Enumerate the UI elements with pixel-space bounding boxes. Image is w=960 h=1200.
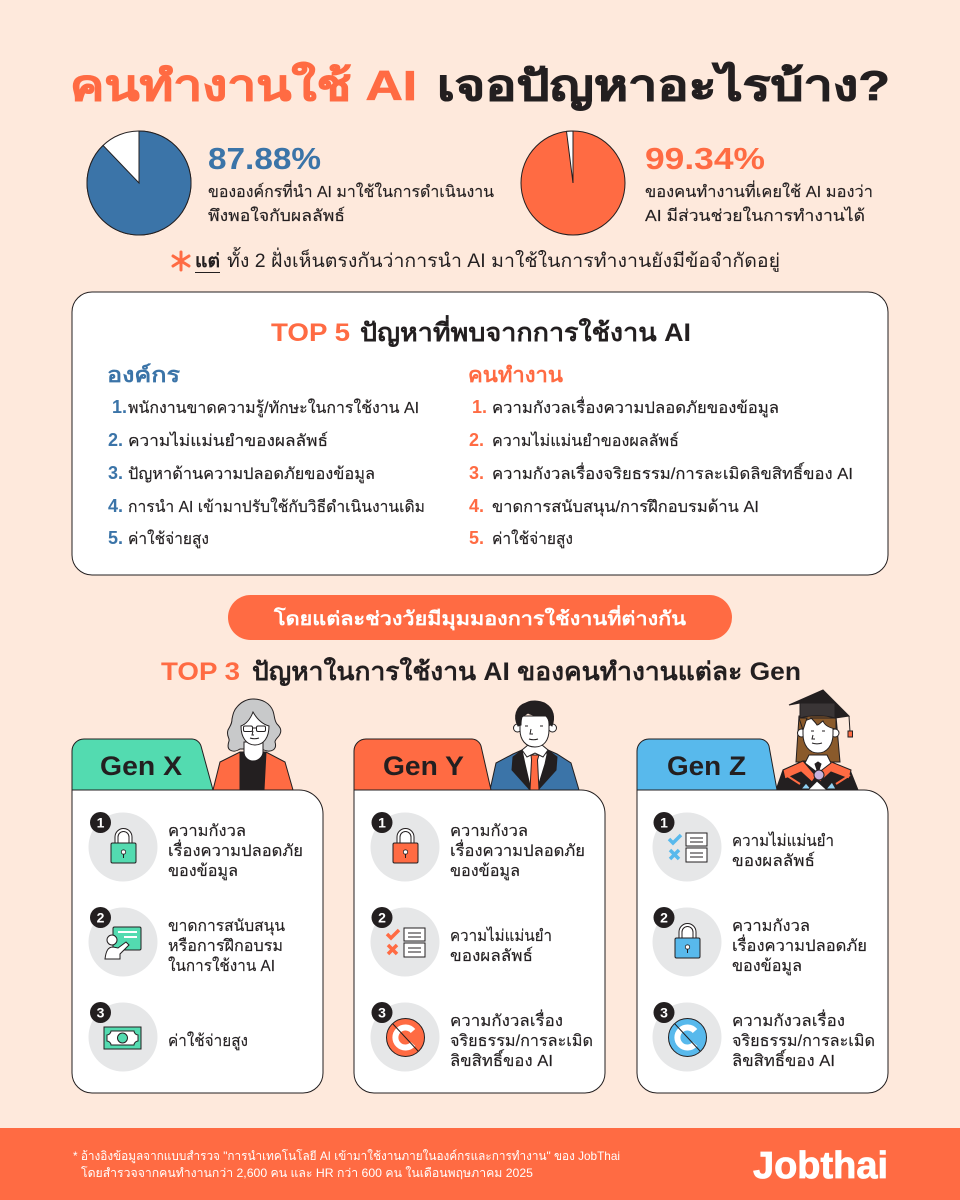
list: organisations: 5. — [108, 528, 123, 548]
section heading: ปัญหาในการใช้งาน AI ของคนทำงานแต่ละ Gen — [252, 656, 801, 686]
item 1: ความกังวล — [450, 823, 528, 840]
stat value: 87.88% — [208, 141, 321, 176]
item 1: ความไม่แม่นยำ — [732, 831, 834, 850]
footer — [0, 1128, 960, 1200]
card: Gen Z — [637, 739, 888, 1093]
item 2: ของผลลัพธ์ — [450, 946, 533, 965]
item 2 — [652, 907, 867, 976]
stat description: ขององค์กรที่นำ AI มาใช้ในการดำเนินงาน — [208, 180, 494, 201]
title — [70, 61, 890, 111]
stat: workers — [521, 131, 873, 235]
list: organisations: 2. — [108, 430, 123, 450]
logo: Jobthai — [753, 1145, 888, 1187]
item 1 — [370, 812, 585, 882]
list: workers: 3. — [469, 463, 484, 483]
source note: * อ้างอิงข้อมูลจากแบบสำรวจ "การนำเทคโนโลยี AI เข้ามาใช้งานภายในองค์กรและการทำงาน" ของ JobThai — [73, 1149, 620, 1164]
item 2: 2 — [378, 910, 386, 926]
item 2: ความกังวล — [732, 918, 810, 935]
item 3: 3 — [378, 1004, 386, 1020]
item 2: เรื่องความปลอดภัย — [732, 934, 867, 955]
stat description: AI มีส่วนช่วยในการทำงานได้ — [645, 206, 865, 225]
item 2: ขาดการสนับสนุน — [168, 918, 285, 936]
tab label: Gen Z — [667, 751, 746, 781]
illustration: Gen Y man — [490, 701, 579, 790]
stat description — [645, 180, 873, 225]
list: organisations — [107, 363, 425, 549]
list: workers: ขาดการสนับสนุน/การฝึกอบรมด้าน AI — [492, 498, 759, 517]
list: workers: 4. — [469, 496, 484, 516]
pill banner — [228, 595, 732, 640]
stat description — [208, 180, 494, 225]
item 1: ของข้อมูล — [450, 862, 520, 881]
pill banner: โดยแต่ละช่วงวัยมีมุมมองการใช้งานที่ต่างกัน — [273, 605, 686, 631]
item 2: หรือการฝึกอบรม — [168, 937, 283, 955]
list: organisations: 3. — [108, 463, 123, 483]
stat description: ของคนทำงานที่เคยใช้ AI มองว่า — [645, 180, 873, 201]
item 3: ลิขสิทธิ์ของ AI — [450, 1049, 553, 1070]
item 2: 2 — [97, 910, 105, 926]
stat value: 99.34% — [645, 141, 765, 176]
list: organisations: 1. — [112, 397, 127, 417]
panel: top 5 problems — [72, 292, 888, 575]
list: workers: ค่าใช้จ่ายสูง — [492, 529, 573, 549]
note line: ทั้ง 2 ฝั่งเห็นตรงกันว่าการนำ AI มาใช้ในการทำงานยังมีข้อจำกัดอยู่ — [227, 247, 780, 272]
list: organisations: องค์กร — [107, 363, 181, 387]
list: workers: ความกังวลเรื่องความปลอดภัยของข้อมูล — [492, 396, 779, 418]
list: workers: ความไม่แม่นยำของผลลัพธ์ — [492, 431, 679, 450]
card body — [354, 790, 605, 1093]
item 3: จริยธรรม/การละเมิด — [450, 1033, 593, 1050]
panel heading: TOP 5 — [271, 319, 350, 347]
card: Gen Y — [354, 739, 605, 1093]
illustration: Gen Z graduate — [776, 690, 858, 790]
pie chart: 87.88% — [87, 131, 191, 235]
item 1: 1 — [97, 814, 105, 830]
item 3: ความกังวลเรื่อง — [450, 1009, 563, 1030]
card body — [72, 790, 323, 1093]
item 2 — [88, 907, 285, 976]
item 1: ความกังวล — [168, 823, 246, 840]
item 3: ค่าใช้จ่ายสูง — [168, 1031, 248, 1051]
item 3 — [370, 1002, 593, 1072]
panel heading: ปัญหาที่พบจากการใช้งาน AI — [360, 315, 691, 347]
item 1: 1 — [378, 814, 386, 830]
tab — [354, 739, 491, 790]
note line: แต่ — [195, 251, 220, 272]
tab label: Gen Y — [383, 751, 464, 781]
source note: โดยสำรวจจากคนทำงานกว่า 2,600 คน และ HR กว่า 600 คน ในเดือนพฤษภาคม 2025 — [81, 1166, 533, 1180]
item 1: 1 — [660, 814, 668, 830]
item 3 — [652, 1002, 875, 1072]
list: workers: ความกังวลเรื่องจริยธรรม/การละเมิดลิขสิทธิ์ของ AI — [492, 462, 853, 483]
list: workers: 5. — [469, 528, 484, 548]
item 3: 3 — [660, 1004, 668, 1020]
tab — [72, 739, 213, 790]
title: เจอปัญหาอะไรบ้าง? — [437, 61, 890, 111]
list: workers: 1. — [472, 397, 487, 417]
section heading: TOP 3 — [161, 658, 240, 686]
list: workers — [468, 364, 853, 549]
item 1: ของผลลัพธ์ — [732, 851, 815, 870]
item 1 — [652, 812, 834, 882]
illustration: Gen X woman — [213, 699, 293, 790]
item 1: ของข้อมูล — [168, 862, 238, 881]
card body — [637, 790, 888, 1093]
pie chart: 99.34% — [521, 131, 625, 235]
item 3: ความกังวลเรื่อง — [732, 1009, 845, 1030]
item 1: เรื่องความปลอดภัย — [168, 839, 303, 860]
card: Gen X — [72, 739, 323, 1093]
list: organisations: ความไม่แม่นยำของผลลัพธ์ — [128, 431, 328, 450]
source note — [73, 1149, 620, 1180]
icon: asterisk — [173, 252, 189, 270]
list: workers: คนทำงาน — [468, 364, 564, 387]
item 3: ลิขสิทธิ์ของ AI — [732, 1049, 835, 1070]
item 3: 3 — [97, 1004, 105, 1020]
item 1 — [88, 812, 303, 882]
tab label: Gen X — [100, 751, 182, 781]
item 2: ในการใช้งาน AI — [168, 956, 275, 975]
title: คนทำงานใช้ AI — [70, 61, 417, 109]
list: organisations: พนักงานขาดความรู้/ทักษะในการใช้งาน AI — [128, 398, 419, 418]
item 2: ของข้อมูล — [732, 957, 802, 976]
item 3: จริยธรรม/การละเมิด — [732, 1033, 875, 1050]
item 2: 2 — [660, 910, 668, 926]
panel heading — [271, 315, 691, 347]
item 2: ความไม่แม่นยำ — [450, 926, 552, 945]
item 2 — [370, 907, 552, 976]
item 1: เรื่องความปลอดภัย — [450, 839, 585, 860]
list: organisations: 4. — [108, 496, 123, 516]
tab — [637, 739, 777, 790]
item 3 — [88, 1002, 248, 1072]
list: organisations: ปัญหาด้านความปลอดภัยของข้อมูล — [128, 465, 375, 484]
stat: organisations — [87, 131, 494, 235]
list: organisations: การนำ AI เข้ามาปรับใช้กับวิธีดำเนินงานเดิม — [128, 497, 425, 516]
stat description: พึงพอใจกับผลลัพธ์ — [208, 206, 345, 225]
list: workers: 2. — [469, 430, 484, 450]
list: organisations: ค่าใช้จ่ายสูง — [128, 529, 209, 549]
